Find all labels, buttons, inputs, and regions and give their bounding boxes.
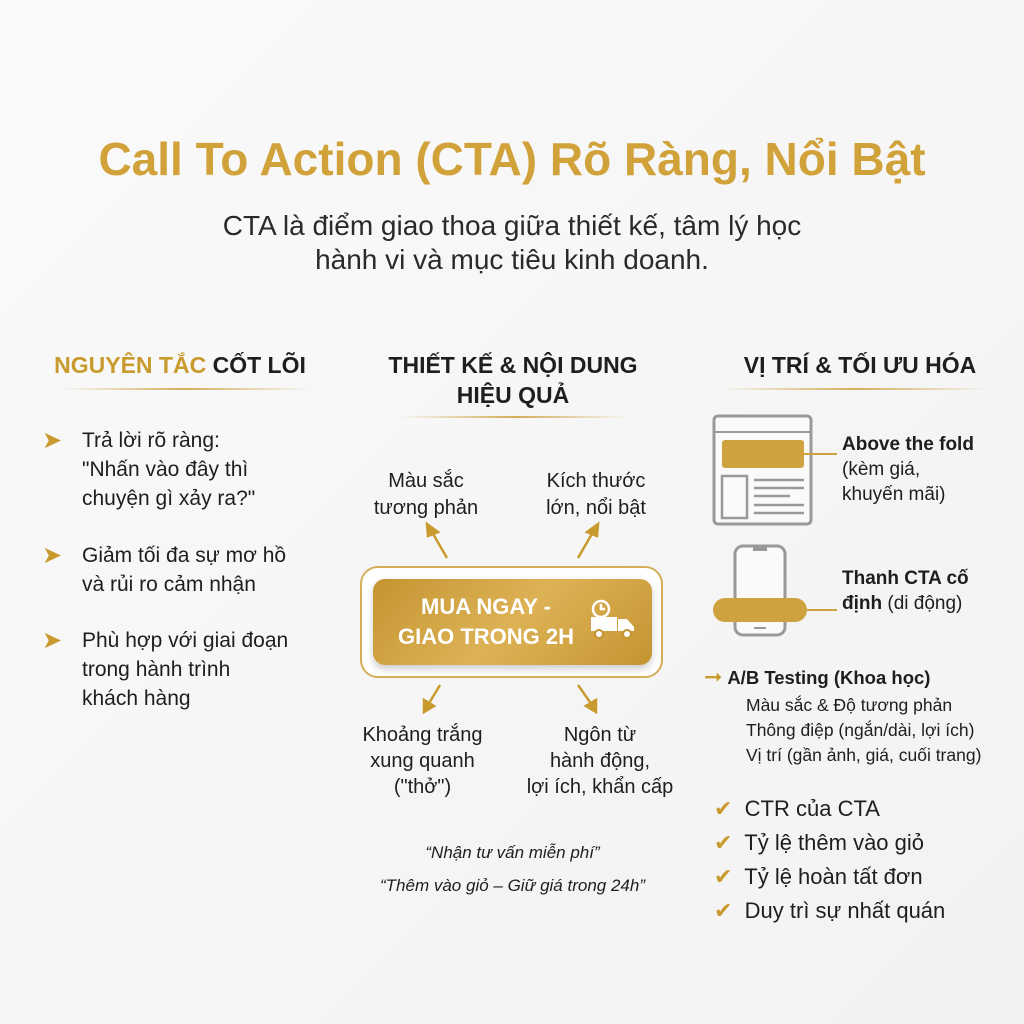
arrows — [422, 521, 600, 714]
label: whitespace: ("thở") — [394, 776, 451, 798]
label: wording: lợi ích, khẩn cấp — [527, 776, 673, 798]
text: ➤ — [42, 627, 62, 654]
list: core principles — [42, 427, 288, 710]
item 3 — [42, 627, 288, 710]
text: ➤ — [42, 542, 62, 569]
item 1: "Nhấn vào đây thì — [82, 458, 248, 481]
checklist metrics: ✔ Tỷ lệ hoàn tất đơn — [714, 864, 923, 889]
item 2: và rủi ro cảm nhận — [82, 573, 256, 596]
CTA button: MUA NGAY - — [421, 594, 551, 619]
subtitle: hành vi và mục tiêu kinh doanh. — [315, 244, 709, 275]
text: sticky CTA — [842, 568, 969, 614]
item 2 — [42, 542, 286, 596]
subtitle — [223, 210, 801, 275]
item 3: trong hành trình — [82, 658, 230, 681]
label: size: lớn, nổi bật — [546, 497, 646, 519]
examples — [380, 843, 646, 895]
heading: right column: VỊ TRÍ & TỐI ƯU HÓA — [744, 352, 976, 378]
label: whitespace — [362, 723, 483, 798]
CTA button — [360, 566, 663, 678]
A/B testing block — [704, 664, 981, 765]
label: whitespace: xung quanh — [370, 750, 475, 772]
label: wording — [527, 724, 673, 798]
label: wording: hành động, — [550, 750, 650, 772]
item 1 — [42, 427, 255, 510]
label: wording: Ngôn từ — [564, 724, 636, 746]
A/B testing block: ➞ A/B Testing (Khoa học) — [704, 664, 930, 689]
checklist metrics: ✔ Duy trì sự nhất quán — [714, 898, 945, 923]
CTA button: GIAO TRONG 2H — [398, 624, 574, 649]
A/B testing block: Thông điệp (ngắn/dài, lợi ích) — [746, 720, 974, 740]
icon: mobile sticky bar — [713, 544, 837, 636]
checklist metrics: ✔ CTR của CTA — [714, 796, 880, 821]
item 2: Giảm tối đa sự mơ hồ — [82, 544, 286, 567]
examples: “Thêm vào giỏ – Giữ giá trong 24h” — [380, 876, 645, 895]
label: color: tương phản — [374, 497, 478, 519]
icon: delivery truck — [591, 600, 634, 639]
icon: browser above fold — [712, 414, 837, 526]
heading: middle column — [388, 352, 638, 408]
item 3: Phù hợp với giai đoạn — [82, 629, 288, 652]
text: ➤ — [42, 427, 62, 454]
text: above the fold — [842, 434, 974, 505]
label: size: Kích thước — [547, 470, 645, 492]
text: sticky CTA: định (di động) — [842, 593, 962, 614]
text: sticky CTA: Thanh CTA cố — [842, 568, 969, 589]
label: color — [374, 469, 478, 519]
label: whitespace: Khoảng trắng — [362, 724, 483, 746]
heading: left column: NGUYÊN TẮC CỐT LÕI — [54, 352, 306, 378]
label: size — [546, 470, 646, 519]
item 1: chuyện gì xảy ra?" — [82, 487, 255, 510]
text: above the fold: khuyến mãi) — [842, 484, 946, 505]
heading: middle column: THIẾT KẾ & NỘI DUNG — [388, 352, 638, 378]
examples: “Nhận tư vấn miễn phí” — [425, 843, 600, 862]
text: above the fold: (kèm giá, — [842, 459, 920, 480]
heading: middle column: HIỆU QUẢ — [457, 382, 569, 408]
A/B testing block: Vị trí (gần ảnh, giá, cuối trang) — [746, 745, 981, 765]
title: Call To Action (CTA) Rõ Ràng, Nổi Bật — [98, 133, 926, 185]
checklist metrics: ✔ Tỷ lệ thêm vào giỏ — [714, 830, 924, 855]
subtitle: CTA là điểm giao thoa giữa thiết kế, tâm lý học — [223, 210, 801, 241]
item 3: khách hàng — [82, 687, 191, 710]
A/B testing block: Màu sắc & Độ tương phản — [746, 695, 952, 715]
text: above the fold: Above the fold — [842, 434, 974, 455]
checklist metrics — [714, 796, 945, 923]
item 1: Trả lời rõ ràng: — [82, 429, 220, 452]
label: color: Màu sắc — [388, 470, 464, 492]
